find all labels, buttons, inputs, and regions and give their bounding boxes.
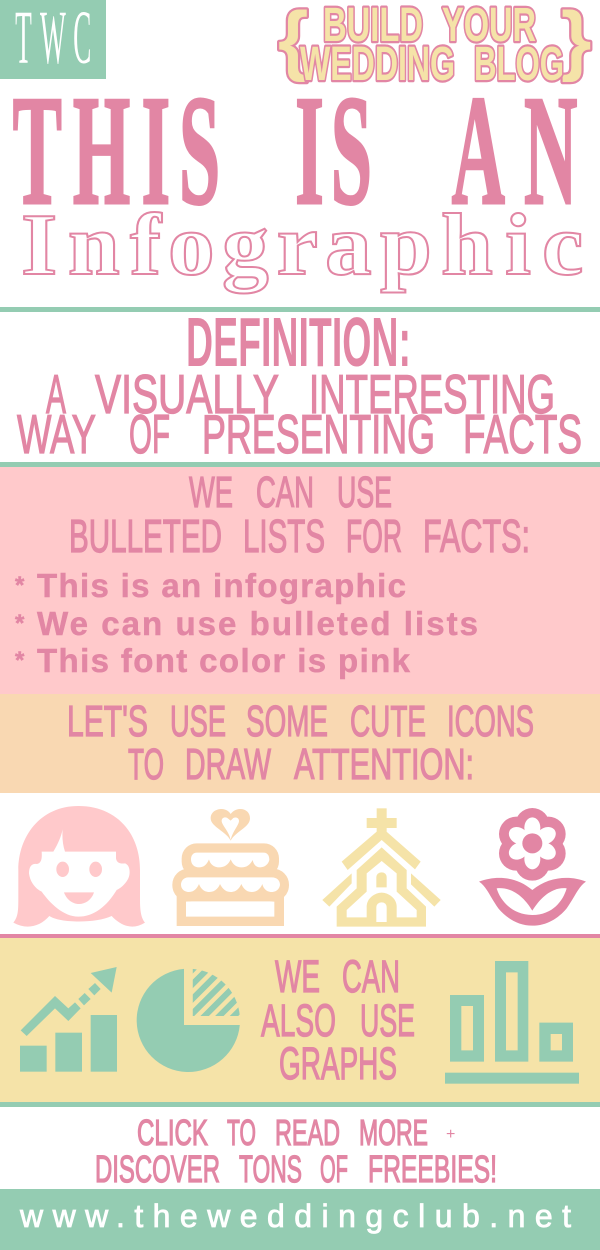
text: we can also use graphs: USE bbox=[360, 995, 415, 1046]
text: we can also use graphs: WE bbox=[275, 951, 320, 1002]
bullet: this font color is pink: This font color is pink bbox=[37, 642, 411, 679]
text: to draw attention: DRAW bbox=[185, 740, 271, 789]
heading: build your wedding blog: WEDDING bbox=[300, 38, 455, 91]
text: let's use some cute icons: LET'S bbox=[67, 697, 148, 746]
divider: pink bbox=[0, 934, 600, 938]
chart icon: rising bars with arrow bbox=[20, 967, 117, 1072]
text: click to read more: READ bbox=[275, 1112, 340, 1153]
text: to draw attention bbox=[128, 740, 474, 789]
text: we can also use graphs: ALSO bbox=[261, 995, 336, 1046]
divider: mint top bbox=[0, 307, 600, 312]
heading: bulleted lists for facts: LISTS bbox=[243, 510, 325, 562]
text: let's use some cute icons: USE bbox=[170, 697, 226, 746]
icon: flower bbox=[479, 808, 586, 926]
panel: definition bbox=[17, 303, 582, 465]
panel: cute icons heading bbox=[0, 694, 600, 793]
heading: we can use: CAN bbox=[256, 468, 314, 517]
text: discover tons of freebies: FREEBIES! bbox=[368, 1149, 497, 1191]
text: we can also use graphs: GRAPHS bbox=[279, 1038, 397, 1089]
text: discover tons of freebies: TONS bbox=[239, 1149, 302, 1191]
text: to draw attention: TO bbox=[128, 740, 164, 789]
chart icon: outlined bars bbox=[445, 961, 579, 1084]
text: a visually interesting bbox=[46, 363, 555, 425]
text: click to read more bbox=[137, 1112, 455, 1153]
heading: build your wedding blog bbox=[278, 0, 591, 91]
icon: wedding cake bbox=[172, 809, 289, 926]
bullet: this font color is pink: * bbox=[15, 647, 25, 674]
icon: church bbox=[322, 808, 441, 927]
heading: build your wedding blog: BUILD bbox=[323, 0, 423, 52]
text: we can also use graphs bbox=[261, 951, 415, 1089]
footer: website url: www.theweddingclub.net bbox=[19, 1198, 571, 1234]
bullet: this is an infographic: * bbox=[15, 572, 25, 599]
footer: website url bbox=[0, 1189, 600, 1250]
text: way of presenting facts: OF bbox=[129, 403, 170, 465]
text: discover tons of freebies: DISCOVER bbox=[95, 1149, 220, 1191]
panel: graphs bbox=[0, 938, 600, 1102]
bullet: we can use bulleted lists: We can use bulleted lists bbox=[37, 605, 478, 642]
bullet: this is an infographic: This is an infographic bbox=[37, 567, 406, 604]
text: a visually interesting: VISUALLY bbox=[95, 363, 279, 425]
text: click to read more: MORE bbox=[359, 1112, 428, 1153]
text: let's use some cute icons: CUTE bbox=[350, 697, 426, 746]
heading: build your wedding blog: YOUR bbox=[442, 0, 536, 52]
bullet: we can use bulleted lists: * bbox=[15, 610, 25, 637]
divider: mint middle bbox=[0, 462, 600, 467]
text: click to read more: TO bbox=[227, 1112, 256, 1153]
text: click to read more: + bbox=[446, 1126, 455, 1143]
text: let's use some cute icons bbox=[67, 697, 534, 746]
heading: we can use: USE bbox=[337, 468, 392, 517]
heading: we can use: WE bbox=[189, 468, 233, 517]
heading: bulleted lists for facts: BULLETED bbox=[69, 510, 222, 562]
text: click to read more: CLICK bbox=[137, 1112, 208, 1153]
heading: bulleted lists for facts: FACTS: bbox=[423, 510, 530, 562]
text: a visually interesting: A bbox=[46, 363, 66, 425]
text: discover tons of freebies: OF bbox=[320, 1149, 348, 1191]
title: this is an: THIS IS AN bbox=[13, 63, 577, 238]
title: infographic outlined: Infographic bbox=[21, 195, 583, 293]
text: way of presenting facts: WAY bbox=[17, 403, 96, 465]
heading: bulleted lists for facts: FOR bbox=[346, 510, 402, 562]
heading: definition: DEFINITION: bbox=[186, 303, 411, 381]
text: let's use some cute icons: SOME bbox=[246, 697, 328, 746]
panel: bulleted lists bbox=[0, 467, 600, 694]
text: let's use some cute icons: ICONS bbox=[447, 697, 534, 746]
heading: bulleted lists for facts bbox=[69, 510, 530, 562]
text: we can also use graphs: CAN bbox=[342, 951, 400, 1002]
divider: mint lower bbox=[0, 1102, 600, 1107]
text: way of presenting facts bbox=[17, 403, 582, 465]
text: way of presenting facts: PRESENTING bbox=[202, 403, 435, 465]
text: to draw attention: ATTENTION: bbox=[294, 740, 474, 789]
heading: we can use bbox=[189, 468, 392, 517]
icon: girl face bbox=[13, 806, 145, 927]
text: discover tons of freebies bbox=[95, 1149, 497, 1191]
chart icon: pie bbox=[136, 968, 240, 1072]
